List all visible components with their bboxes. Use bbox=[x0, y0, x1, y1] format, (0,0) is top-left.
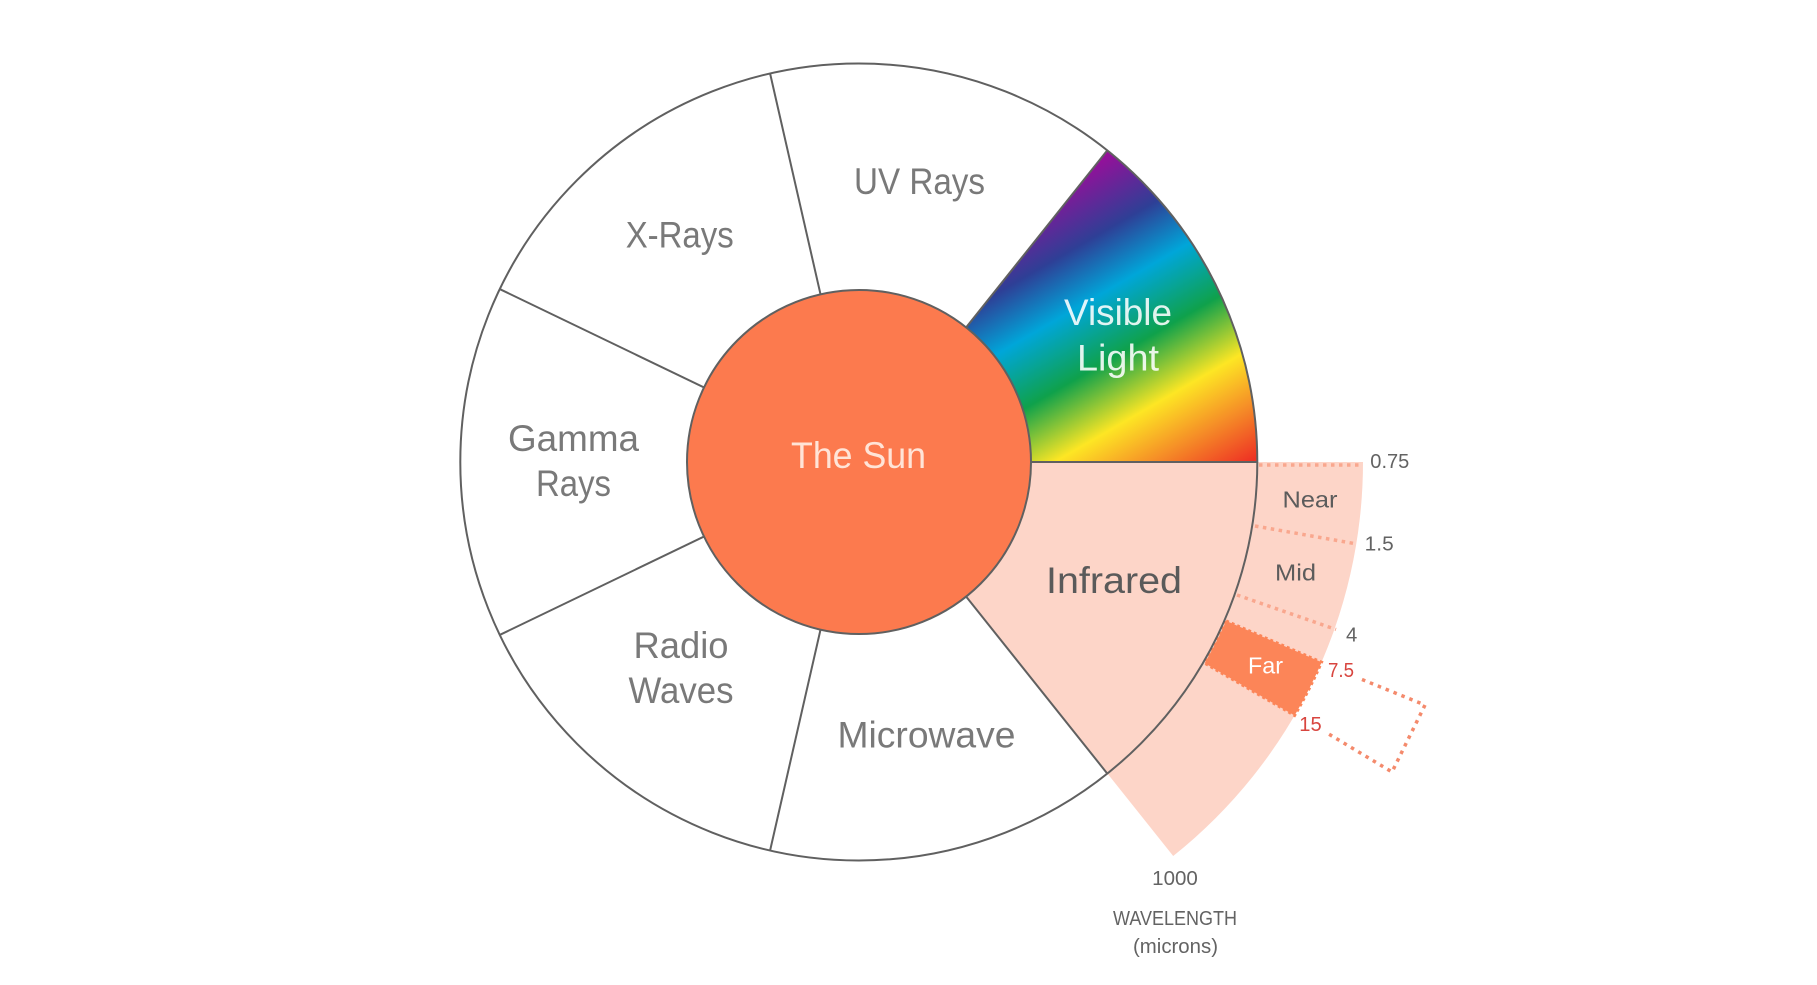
infrared extended wedge bbox=[859, 462, 1363, 856]
wavelength value 4: 4 bbox=[1346, 624, 1357, 646]
label: X-rays: X-Rays bbox=[626, 214, 734, 256]
label: UV rays: UV Rays bbox=[854, 161, 985, 202]
the sun circle bbox=[687, 290, 1031, 634]
wavelength value 15: 15 bbox=[1299, 714, 1322, 736]
wavelength value 1000: 1000 bbox=[1152, 868, 1198, 890]
label: the sun: The Sun bbox=[791, 435, 926, 476]
axis caption: wavelength in microns bbox=[1113, 908, 1237, 958]
label: gamma rays bbox=[508, 418, 639, 504]
label: gamma rays: Rays bbox=[536, 463, 611, 504]
axis caption: wavelength in microns: WAVELENGTH bbox=[1113, 908, 1237, 930]
label: far band: Far bbox=[1248, 652, 1283, 678]
dotted boundary lines for infrared bands bbox=[1237, 465, 1363, 630]
wavelength value 0.75: 0.75 bbox=[1370, 451, 1409, 473]
outer wheel ring and spokes bbox=[460, 64, 1257, 860]
label: infrared: Infrared bbox=[1046, 560, 1182, 601]
visible light rainbow sector bbox=[859, 151, 1257, 462]
label: radio waves: Radio bbox=[634, 625, 728, 666]
label: visible light: Visible bbox=[1064, 292, 1172, 333]
axis caption: wavelength in microns: (microns) bbox=[1133, 936, 1218, 958]
label: visible light: Light bbox=[1077, 338, 1160, 379]
wavelength value 1.5: 1.5 bbox=[1365, 534, 1394, 556]
dotted bracket box for far infrared bbox=[1327, 680, 1425, 772]
wavelength value 7.5: 7.5 bbox=[1328, 660, 1354, 682]
label: gamma rays: Gamma bbox=[508, 418, 639, 459]
label: radio waves bbox=[628, 625, 734, 711]
label: radio waves: Waves bbox=[628, 670, 734, 711]
label: mid band: Mid bbox=[1275, 560, 1316, 586]
label: microwave: Microwave bbox=[838, 714, 1016, 756]
far infrared band bbox=[1205, 621, 1322, 716]
label: visible light bbox=[1064, 292, 1172, 379]
label: near band: Near bbox=[1282, 486, 1338, 512]
